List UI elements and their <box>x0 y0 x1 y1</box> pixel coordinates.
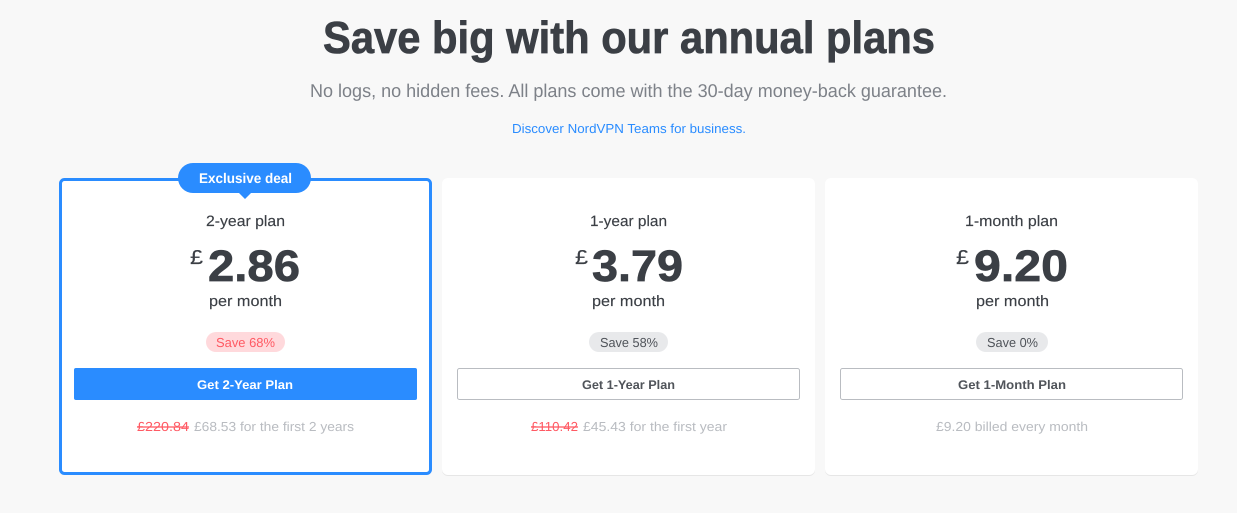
savings badge <box>589 332 668 352</box>
per month: per month <box>209 293 282 310</box>
savings badge: Save 0% <box>987 335 1038 350</box>
exclusive deal badge: Exclusive deal <box>199 170 292 186</box>
page header <box>310 12 947 136</box>
price: 3.79 <box>592 242 683 291</box>
subtitle: No logs, no hidden fees. All plans come with the 30-day money-back guarantee. <box>310 80 947 101</box>
plan name: 1-month plan <box>965 213 1058 230</box>
savings badge <box>206 332 285 352</box>
call to action button: Get 1-Month Plan <box>958 378 1066 392</box>
plan name: 2-year plan <box>206 213 285 230</box>
savings badge: Save 58% <box>600 335 658 350</box>
card outline <box>60 180 430 474</box>
price: £ <box>956 247 969 269</box>
per month: per month <box>976 293 1049 310</box>
price: 2.86 <box>208 242 300 291</box>
price: £ <box>190 247 203 269</box>
card <box>442 178 815 475</box>
billing note: £68.53 for the first 2 years <box>194 419 355 434</box>
business link: Discover NordVPN Teams for business. <box>512 121 746 136</box>
call to action button: Get 2-Year Plan <box>197 378 293 392</box>
savings badge <box>976 332 1048 352</box>
per month: per month <box>592 293 665 310</box>
billing note: £9.20 billed every month <box>936 419 1088 434</box>
call to action button <box>74 368 417 400</box>
savings badge: Save 68% <box>216 335 275 350</box>
plan name: 1-year plan <box>590 213 667 230</box>
panel: 1-year plan <box>442 178 815 475</box>
panel: 1-month plan <box>825 178 1198 475</box>
price: 9.20 <box>974 242 1068 291</box>
call to action button: Get 1-Year Plan <box>582 378 675 392</box>
billing note: £110.42 <box>531 419 578 434</box>
billing note: £45.43 for the first year <box>583 419 728 434</box>
exclusive deal badge <box>178 163 311 199</box>
price: £ <box>575 247 588 269</box>
title: Save big with our annual plans <box>323 12 935 63</box>
billing note <box>531 419 728 434</box>
billing note: £220.84 <box>137 419 189 434</box>
billing note <box>137 419 355 434</box>
call to action button <box>458 368 800 400</box>
card <box>825 178 1198 475</box>
call to action button <box>840 368 1182 400</box>
panel: 2-year plan <box>60 163 430 474</box>
